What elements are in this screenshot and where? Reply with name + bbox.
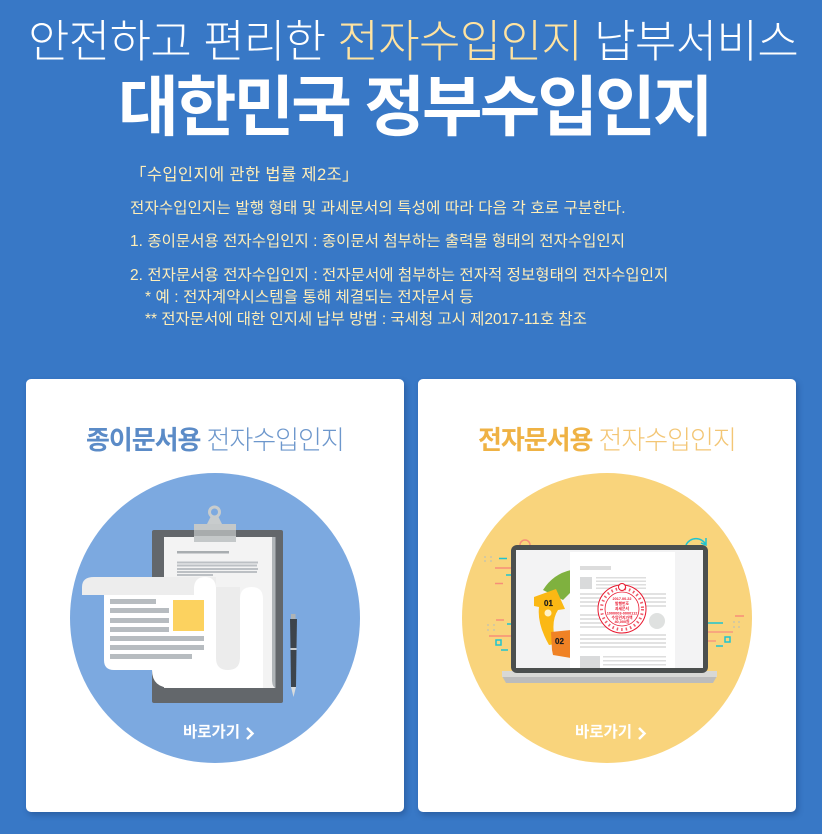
yellow arrow 01: [534, 589, 565, 645]
front document scroll: [82, 577, 275, 688]
note 2: ** 전자문서에 대한 인지세 납부 방법 : 국세청 고시 제2017-11호 참조: [145, 311, 587, 328]
note 1: * 예 : 전자계약시스템을 통해 체결되는 전자문서 등: [145, 289, 474, 306]
title: main heading: 대한민국 정부수입인지: [118, 70, 711, 144]
item 1: 1. 종이문서용 전자수입인지 : 종이문서 첨부하는 출력물 형태의 전자수입인지: [130, 233, 625, 250]
link: go to electronic: 바로가기: [575, 723, 632, 741]
icon: paper document circle: [70, 473, 360, 763]
decorative tech marks: [484, 538, 744, 650]
item 2: 2. 전자문서용 전자수입인지 : 전자문서에 첨부하는 전자적 정보형태의 전자수입인지: [130, 267, 668, 284]
icon: electronic document circle: [462, 473, 752, 763]
red stamp: [598, 584, 646, 633]
article heading: 「수입인지에 관한 법률 제2조」: [130, 166, 359, 184]
red stamp: 1000003-0000112: [607, 612, 637, 616]
orange arrow 02: [551, 630, 571, 658]
red stamp: 2017.00.22: [612, 597, 632, 601]
panel: paper stamp card: [26, 379, 404, 812]
clipboard: [152, 507, 283, 703]
link: go to paper: 바로가기: [183, 723, 240, 741]
panel: electronic stamp card: [418, 379, 796, 812]
card heading: paper: 종이문서용 전자수입인지: [86, 425, 344, 455]
red stamp: 과세문서: [615, 606, 629, 611]
card heading: electronic: 전자문서용 전자수입인지: [478, 425, 736, 455]
icon: pen: [290, 614, 297, 697]
legal text block: [130, 166, 668, 328]
yellow arrow 01: 01: [544, 599, 553, 608]
green arrow segment: [543, 570, 571, 600]
orange arrow 02: 02: [555, 637, 564, 646]
red stamp: 40,000원: [614, 619, 630, 624]
red stamp: 수입인지가액: [612, 615, 633, 620]
intro sentence: 전자수입인지는 발행 형태 및 과세문서의 특성에 따라 다음 각 호로 구분한다.: [130, 200, 626, 217]
document on screen: [570, 552, 675, 668]
title: service line: 안전하고 편리한 전자수입인지 납부서비스: [28, 16, 798, 67]
laptop: [502, 545, 717, 683]
red stamp: 발행번호: [615, 601, 629, 606]
